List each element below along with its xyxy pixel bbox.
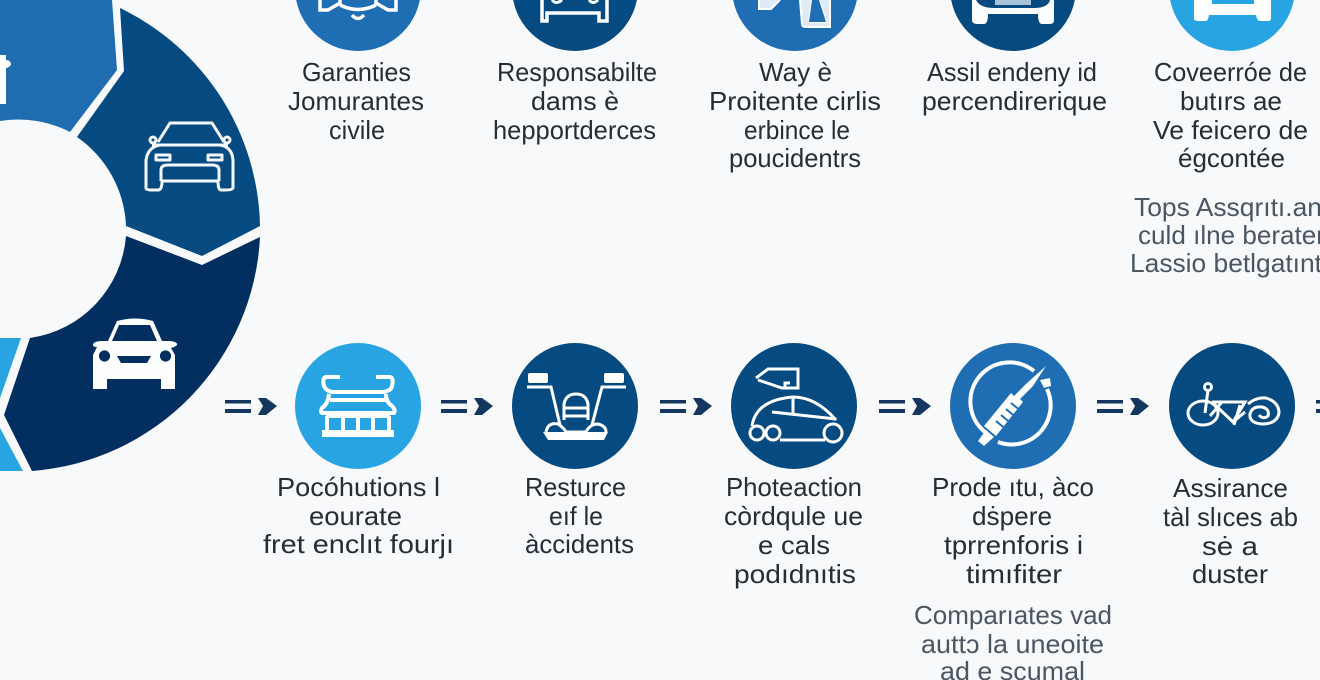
label 10: Assirance (1173, 473, 1288, 503)
row 1: icon circles (295, 0, 1295, 51)
side note top: culd ılne berater (1138, 220, 1320, 250)
label 10: sė a (1202, 531, 1259, 561)
label 1: civile (329, 115, 385, 145)
side note bottom (914, 600, 1112, 680)
label 6: eourate (309, 501, 402, 531)
label 9: Prode ıtu, àco (932, 472, 1094, 502)
side note top: Tops Assqrıtı.an (1134, 192, 1320, 222)
side note top: Lassio betlgatınt (1130, 248, 1320, 278)
label 5 (1153, 57, 1308, 173)
label 3 (709, 57, 881, 173)
label 1: Jomurantes (288, 86, 424, 116)
label 3: poucidentrs (729, 143, 861, 173)
label 5: butırs ae (1180, 86, 1282, 116)
label 4 (922, 57, 1107, 116)
label 6: Pocóhutions l (277, 472, 440, 502)
label 1: Garanties (302, 57, 411, 87)
label 3: erbince le (744, 115, 850, 145)
circle 4 (950, 0, 1076, 51)
label 10 (1163, 473, 1298, 589)
icon: machine with mirrors (512, 343, 638, 469)
segment: navy with solid car (4, 236, 260, 471)
label 2 (493, 57, 657, 145)
circle 2 (512, 0, 638, 51)
label 5: Coveerróe de (1154, 57, 1307, 87)
label 7 (525, 472, 634, 559)
label 7: àccidents (525, 529, 634, 559)
circle 1 (295, 0, 421, 51)
label 1 (288, 57, 424, 145)
label 7: Resturce (525, 472, 626, 502)
label 7: eıf le (549, 501, 603, 531)
label 8: podıdnıtis (734, 559, 856, 589)
label 9: timıfiter (966, 559, 1062, 589)
label 10: duster (1192, 559, 1268, 589)
side note bottom: auttɔ la uneoite (921, 629, 1104, 659)
icon: solid car (93, 318, 177, 389)
label 3: Way è (759, 57, 832, 87)
label 8 (724, 472, 863, 589)
label 6 (263, 472, 454, 559)
icon: partial car in top segment (0, 55, 11, 104)
label 4: percendirerique (922, 86, 1107, 116)
side note top (1130, 192, 1320, 278)
row 2 labels (263, 472, 1298, 680)
icon: tool in ring (950, 343, 1076, 469)
label 9 (932, 472, 1094, 589)
label 9: tprrenforis i (944, 530, 1083, 560)
label 9: dṡpere (972, 501, 1052, 531)
side note bottom: Comparıates vad (914, 600, 1112, 630)
label 8: e cals (758, 530, 830, 560)
label 2: Responsabilte (497, 57, 657, 87)
flow arrows (225, 398, 1320, 415)
label 8: còrdqule ue (724, 501, 863, 531)
row 2: icon circles (295, 343, 1295, 469)
circle 3 (732, 0, 858, 51)
circle 5 (1169, 0, 1295, 51)
label 6: fret enclıt fourjı (263, 529, 454, 559)
segment: mid blue with car outline (77, 8, 260, 256)
label 8: Photeaction (726, 472, 862, 502)
label 5: égcontée (1178, 143, 1285, 173)
icon: car with roof object (731, 343, 857, 469)
row 1 labels (288, 57, 1320, 278)
icon: car outline (146, 123, 233, 190)
label 2: hepportderces (493, 115, 656, 145)
icon: temple bridge (295, 343, 421, 469)
label 4: Assil endeny id (927, 57, 1097, 87)
segment: top blue (0, 0, 117, 132)
label 3: Proitente cirlis (709, 86, 881, 116)
label 10: tàl slıces ab (1163, 502, 1298, 532)
icon: bicycle (1169, 343, 1295, 469)
donut chart (0, 0, 260, 471)
label 5: Ve feicero de (1153, 115, 1308, 145)
segment: light blue (0, 338, 23, 471)
label 2: dams è (531, 86, 619, 116)
